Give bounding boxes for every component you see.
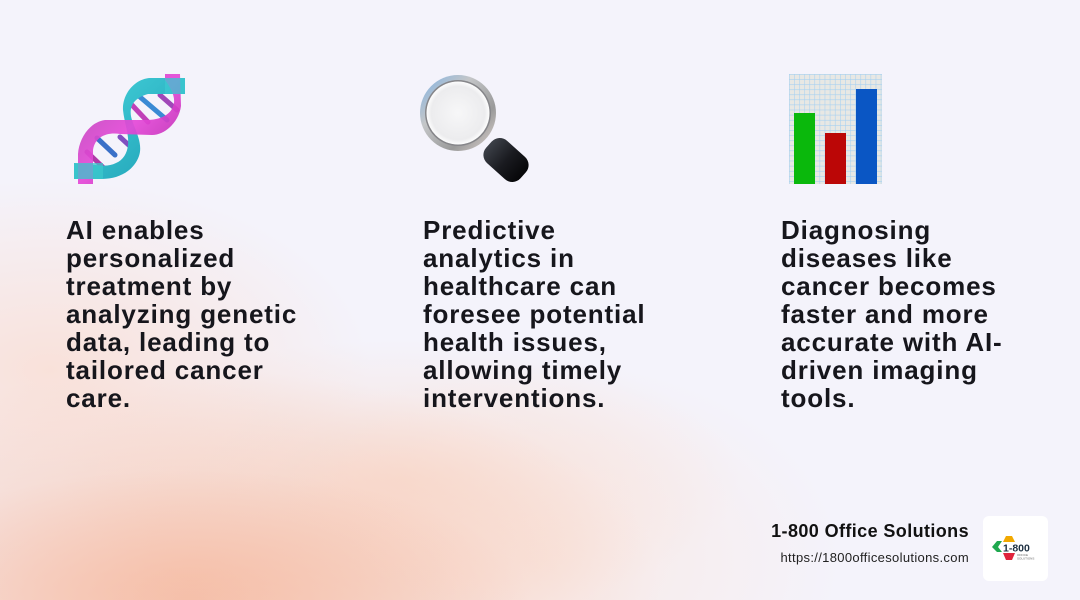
blue bar: [856, 89, 877, 184]
text: personalized treatment: personalized: [66, 243, 235, 273]
text: personalized treatment: [66, 215, 297, 413]
icon: bar chart: [789, 74, 882, 184]
text: predictive analytics: [423, 215, 646, 413]
text: diagnosing diseases: faster and more: [781, 299, 989, 329]
text: diagnosing diseases: [781, 215, 1003, 413]
text: diagnosing diseases: accurate with AI-: [781, 327, 1003, 357]
text: personalized treatment: care.: [66, 383, 131, 413]
text: personalized treatment: treatment by: [66, 271, 232, 301]
icon: logo mark: OFFICE: [1017, 553, 1028, 557]
text: predictive analytics: health issues,: [423, 327, 607, 357]
text: predictive analytics: Predictive: [423, 215, 556, 245]
icon: logo mark: [992, 536, 1034, 560]
text: diagnosing diseases: driven imaging: [781, 355, 978, 385]
handle: [479, 133, 533, 187]
icon: logo mark: SOLUTIONS: [1017, 556, 1034, 560]
text: diagnosing diseases: cancer becomes: [781, 271, 997, 301]
text: diagnosing diseases: tools.: [781, 383, 855, 413]
text: predictive analytics: foresee potential: [423, 299, 646, 329]
red bar: [825, 133, 846, 184]
lens: [420, 75, 496, 151]
text: predictive analytics: allowing timely: [423, 355, 622, 385]
text: diagnosing diseases: Diagnosing: [781, 215, 931, 245]
text: personalized treatment: AI enables: [66, 215, 205, 245]
green bar: [794, 113, 815, 184]
text: diagnosing diseases: diseases like: [781, 243, 953, 273]
text: personalized treatment: data, leading to: [66, 327, 270, 357]
icon: magnifying glass: [420, 75, 529, 182]
icon: DNA helix: [74, 74, 185, 184]
text: predictive analytics: interventions.: [423, 383, 605, 413]
text: predictive analytics: healthcare can: [423, 271, 617, 301]
text: predictive analytics: analytics in: [423, 243, 575, 273]
rungs: [87, 95, 177, 172]
icon: logo mark: 1-800: [1003, 542, 1030, 554]
text: personalized treatment: tailored cancer: [66, 355, 264, 385]
company url: https://1800officesolutions.com: [780, 550, 969, 565]
cyan strand: [74, 78, 185, 179]
text: personalized treatment: analyzing genetic: [66, 299, 297, 329]
company name: 1-800 Office Solutions: [771, 521, 969, 541]
magenta strand: [78, 74, 181, 184]
logo card: [983, 516, 1048, 581]
